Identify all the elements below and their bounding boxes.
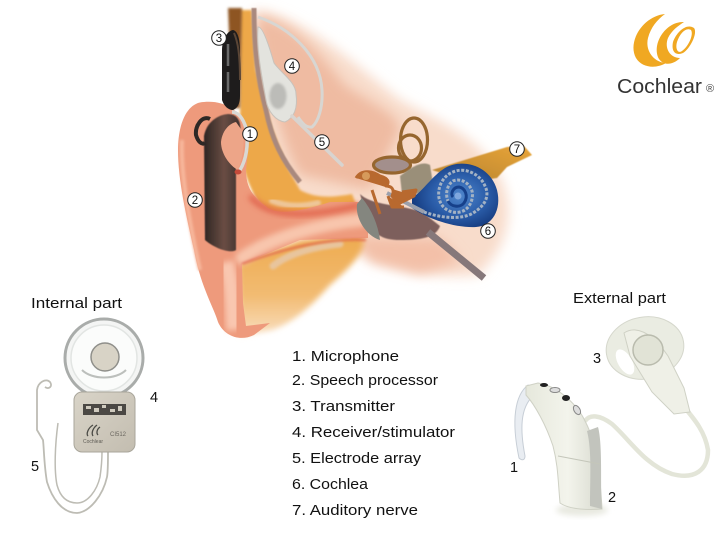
processor shadow <box>556 504 608 516</box>
ear hook <box>515 385 533 460</box>
number 4: 4 <box>150 390 158 406</box>
electrode lead loop <box>258 17 322 127</box>
legend item 7: 7. Auditory nerve <box>292 503 418 519</box>
ear hook <box>232 112 247 170</box>
number marker 2: 2 <box>192 195 198 207</box>
skull bone strip <box>254 8 300 182</box>
number marker 4 <box>285 59 299 73</box>
Cochlear logo <box>617 14 714 98</box>
vestibule <box>400 163 434 194</box>
magnet <box>91 343 119 371</box>
number 1: 1 <box>510 460 518 476</box>
number marker 5: 5 <box>319 137 325 149</box>
number marker 2 <box>188 193 202 207</box>
top buttons <box>540 383 582 416</box>
fat pale streaks <box>273 244 340 266</box>
brown hair strip <box>228 8 242 108</box>
number marker 7 <box>510 142 524 156</box>
ossicles <box>356 172 416 214</box>
legend item 2: 2. Speech processor <box>292 373 438 389</box>
pinna highlights <box>242 220 362 258</box>
transmitter coil <box>222 30 240 110</box>
concha oval <box>221 122 244 170</box>
lower skin under canal <box>350 236 462 274</box>
logo wordmark: Cochlear <box>617 76 702 98</box>
orange fat band <box>240 10 356 218</box>
transmitter opening <box>612 346 638 378</box>
cable <box>585 408 708 476</box>
heading: internal part: Internal part <box>31 296 122 312</box>
heading: external part: External part <box>573 291 666 307</box>
legend item 3: 3. Transmitter <box>292 399 395 415</box>
processor body <box>526 383 602 509</box>
number marker 3: 3 <box>216 33 222 45</box>
transmitter disc <box>601 311 689 385</box>
registered mark: ® <box>706 83 714 95</box>
number marker 6 <box>481 224 495 238</box>
cochlear electrode <box>387 193 424 212</box>
pinna <box>178 102 368 338</box>
number marker 5 <box>315 135 329 149</box>
legend item 1: 1. Microphone <box>292 349 399 365</box>
barcode <box>83 404 126 415</box>
implant body text: Cochlear <box>83 439 103 445</box>
logo mark <box>633 14 695 67</box>
internal implant device <box>37 319 143 513</box>
number marker 1: 1 <box>247 129 253 141</box>
number 3: 3 <box>593 351 601 367</box>
lower orange fat <box>238 235 363 336</box>
number marker 6: 6 <box>485 226 491 238</box>
transmitter arm <box>624 330 690 414</box>
stimulator body <box>74 392 135 452</box>
legend item 5: 5. Electrode array <box>292 451 422 467</box>
external device <box>515 311 708 516</box>
lead wires <box>37 380 108 513</box>
receiver coil disc <box>65 319 143 397</box>
legend item 6: 6. Cochlea <box>292 477 369 493</box>
processor side panel <box>587 427 602 509</box>
legend list <box>292 349 455 519</box>
head skin background <box>254 10 508 276</box>
inner skin flap <box>256 16 400 190</box>
transmitter magnet dial <box>633 335 663 365</box>
number 5: 5 <box>31 459 39 475</box>
implant model: CI512 <box>110 432 127 438</box>
number marker 3 <box>212 31 226 45</box>
eardrum <box>357 198 380 240</box>
cochlea <box>412 164 498 227</box>
number marker 4: 4 <box>289 61 296 73</box>
number marker 1 <box>243 127 257 141</box>
body joint <box>558 456 600 464</box>
ear anatomy illustration <box>178 8 532 338</box>
electrode array <box>292 116 342 165</box>
number 2: 2 <box>608 490 616 506</box>
number marker 7: 7 <box>514 144 520 156</box>
semicircular canals <box>374 118 428 173</box>
speech processor behind pinna <box>204 114 240 251</box>
coil arc <box>82 370 126 378</box>
legend item 4: 4. Receiver/stimulator <box>292 425 455 441</box>
implant logo <box>87 425 100 436</box>
eustachian tube <box>428 232 484 278</box>
middle ear cavity <box>360 194 440 240</box>
receiver stimulator <box>258 27 297 122</box>
auditory nerve <box>432 146 532 182</box>
